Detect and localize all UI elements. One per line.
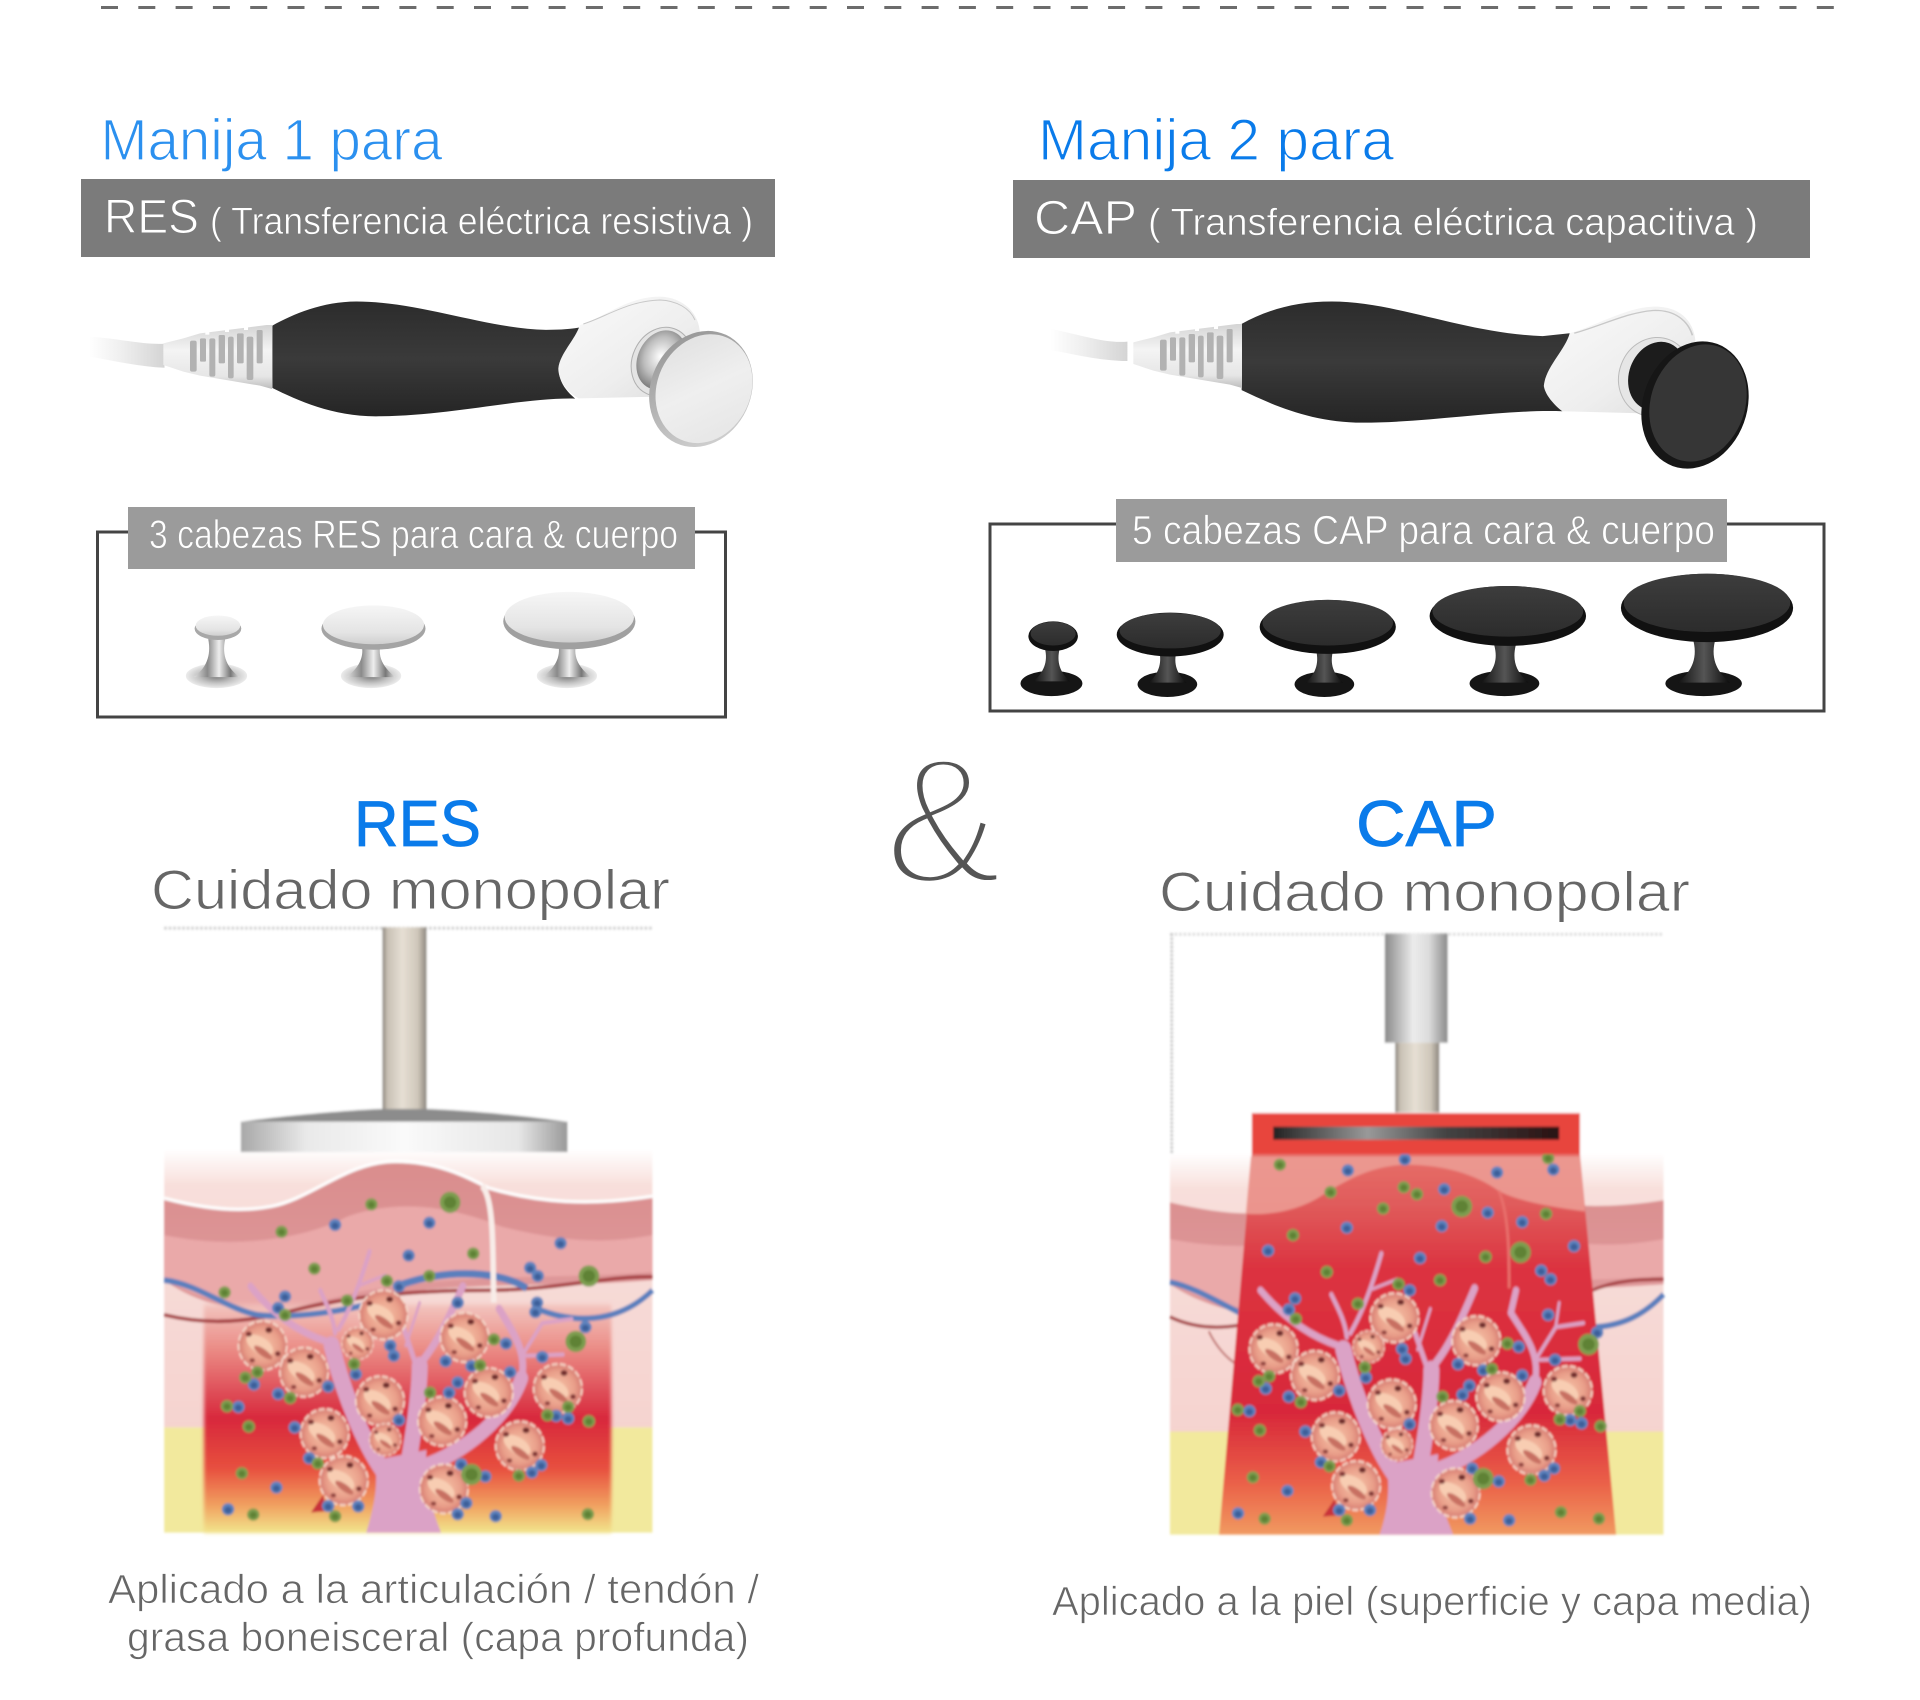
panel: 3 RES heads [98, 507, 726, 717]
illustration: silver RES handpiece [89, 297, 772, 464]
caption: RES application: Aplicado a la articulación / tendón / [108, 1566, 760, 1612]
panel: 5 CAP heads [990, 499, 1824, 711]
heading: RES: RES [354, 787, 481, 860]
blue and green particles [218, 1192, 599, 1522]
ampersand: & [884, 720, 1003, 922]
caption: CAP application: Aplicado a la piel (superficie y capa media) [1052, 1578, 1812, 1624]
tag: 3 cabezas RES: 3 cabezas RES para cara & cuerpo [149, 513, 678, 557]
icons: silver heads [186, 592, 635, 688]
caption: RES application [108, 1566, 760, 1660]
panel: handle 2 CAP [990, 108, 1824, 711]
heated trapezoid zone [1219, 1154, 1616, 1535]
title bar: CAP: ( Transferencia eléctrica capacitiva ) [1148, 202, 1758, 244]
diagram: RES monopolar tissue section [164, 927, 652, 1533]
electrode shaft and plate [241, 927, 567, 1152]
panel: handle 1 RES [81, 108, 775, 717]
blue and green particles [1231, 1152, 1607, 1526]
heading: CAP: CAP [1356, 787, 1497, 860]
subheading: CAP Cuidado monopolar: Cuidado monopolar [1159, 860, 1690, 923]
tag: 3 cabezas RES [128, 507, 695, 569]
dashed divider [101, 6, 1838, 9]
title bar: CAP [1013, 180, 1810, 258]
icons: black heads [1021, 574, 1793, 697]
title bar: CAP: CAP [1034, 192, 1137, 245]
blood vessel tree [1260, 1253, 1583, 1535]
illustration: black CAP handpiece [1050, 302, 1766, 484]
caption: RES application: grasa boneisceral (capa profunda) [127, 1614, 749, 1660]
fat cells [1249, 1293, 1592, 1517]
tag: 5 cabezas CAP [1116, 499, 1727, 562]
title bar: RES [81, 179, 775, 257]
tag: 5 cabezas CAP: 5 cabezas CAP para cara & cuerpo [1132, 507, 1715, 553]
heading: Manija 2 para: Manija 2 para [1038, 108, 1395, 173]
diagram: CAP monopolar tissue section [1170, 934, 1663, 1535]
subheading: RES Cuidado monopolar: Cuidado monopolar [151, 858, 670, 921]
title bar: RES: RES [104, 191, 199, 244]
capacitive electrode [1252, 934, 1580, 1154]
blood vessel tree [250, 1251, 572, 1533]
fat cells [238, 1290, 582, 1513]
heading: Manija 1 para: Manija 1 para [100, 108, 443, 173]
title bar: RES: ( Transferencia eléctrica resistiva ) [210, 201, 753, 243]
